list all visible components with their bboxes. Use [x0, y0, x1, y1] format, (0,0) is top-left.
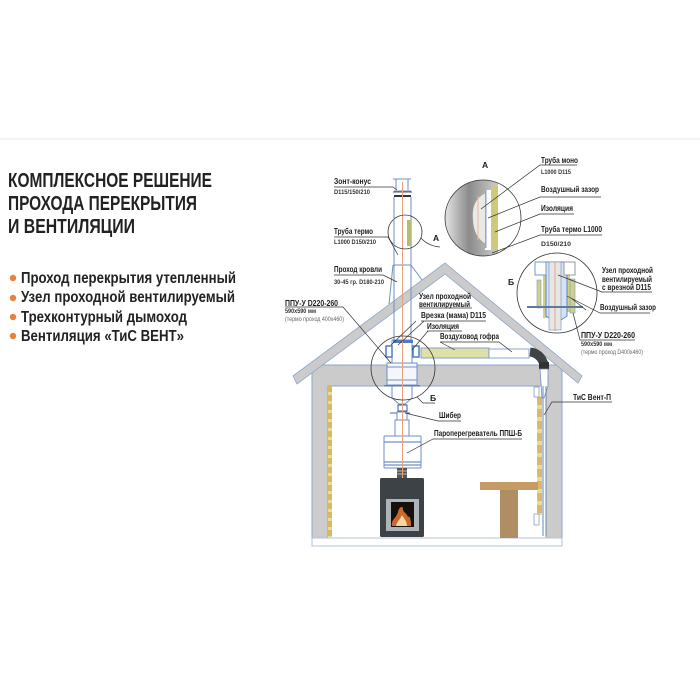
- labels: (термо проход D400х460): [581, 350, 643, 356]
- feature list: [10, 270, 236, 345]
- labels: ППУ-У D220-260: [285, 298, 338, 308]
- ceiling pass: [387, 363, 417, 385]
- circle callouts on house: [371, 215, 440, 403]
- labels: Б: [430, 393, 436, 403]
- feature list: Трехконтурный дымоход: [21, 309, 187, 326]
- table: [480, 482, 538, 538]
- labels: 30-45 гр. D180-210: [334, 280, 385, 286]
- labels: Изоляция: [427, 321, 459, 331]
- title: ПРОХОДА ПЕРЕКРЫТИЯ: [8, 193, 197, 215]
- roof: [293, 263, 582, 384]
- labels: Б: [508, 277, 514, 287]
- labels: Труба термо L1000: [541, 224, 602, 234]
- labels: 590х590 мм: [285, 309, 317, 315]
- labels: А: [482, 160, 488, 170]
- house: [293, 263, 582, 546]
- labels: [285, 155, 656, 438]
- labels: Воздушный зазор: [541, 184, 599, 194]
- feature list: Вентиляция «ТиС ВЕНТ»: [21, 328, 184, 345]
- detail A: [444, 180, 522, 256]
- vent riser: [540, 369, 548, 398]
- labels: L1000 D115: [541, 170, 572, 176]
- upper node: [392, 340, 412, 363]
- title: [8, 170, 212, 238]
- labels: А: [433, 233, 439, 243]
- roof pass: [389, 265, 422, 304]
- labels: вентилируемый: [419, 299, 470, 309]
- steam heater: [384, 436, 421, 468]
- labels: Узел проходной: [419, 291, 471, 301]
- labels: Узел проходной: [602, 265, 653, 275]
- labels: с врезной D115: [602, 282, 651, 292]
- pipe: [394, 197, 411, 340]
- labels: Врезка (мама) D115: [421, 310, 486, 320]
- floor: [312, 538, 562, 546]
- feature list: Узел проходной вентилируемый: [21, 289, 235, 306]
- labels: вентилируемый: [602, 274, 652, 284]
- labels: ТиС Вент-П: [573, 392, 611, 402]
- left wall insulation: [328, 386, 332, 538]
- walls and ceiling slab: [312, 365, 562, 546]
- labels: L1000 D150/210: [334, 240, 377, 246]
- labels: D115/150/210: [334, 190, 371, 196]
- labels: 590х590 мм: [581, 342, 613, 348]
- labels: Воздуховод гофра: [440, 331, 499, 341]
- labels: Воздушный зазор: [600, 302, 656, 312]
- leader lines: [285, 165, 652, 453]
- page top band: [0, 0, 700, 140]
- labels: D150/210: [541, 242, 572, 248]
- labels: Шибер: [439, 410, 461, 420]
- labels: Пароперегреватель ППШ-Б: [434, 428, 522, 438]
- stove connection: [397, 468, 407, 478]
- air duct: [421, 348, 549, 536]
- gate valve: [398, 405, 407, 411]
- labels: (термо проход 400х460): [285, 317, 344, 323]
- detail B: [517, 253, 597, 333]
- labels: Изоляция: [541, 203, 573, 213]
- labels: Труба моно: [541, 155, 578, 165]
- title: КОМПЛЕКСНОЕ РЕШЕНИЕ: [8, 170, 212, 192]
- cone cap: [393, 179, 411, 191]
- labels: Труба термо: [334, 226, 373, 236]
- labels: Зонт-конус: [334, 176, 371, 186]
- labels: ППУ-У D220-260: [581, 330, 635, 340]
- title: И ВЕНТИЛЯЦИИ: [8, 216, 135, 238]
- flue centre line: [402, 182, 404, 478]
- chimney: [384, 179, 422, 478]
- stove: [380, 478, 424, 537]
- labels: Проход кровли: [334, 264, 382, 274]
- right wall insulation: [537, 396, 542, 515]
- corrugated bend: [530, 352, 544, 364]
- feature list: Проход перекрытия утепленный: [21, 270, 236, 287]
- insulation: [537, 280, 541, 308]
- fire: [392, 507, 411, 526]
